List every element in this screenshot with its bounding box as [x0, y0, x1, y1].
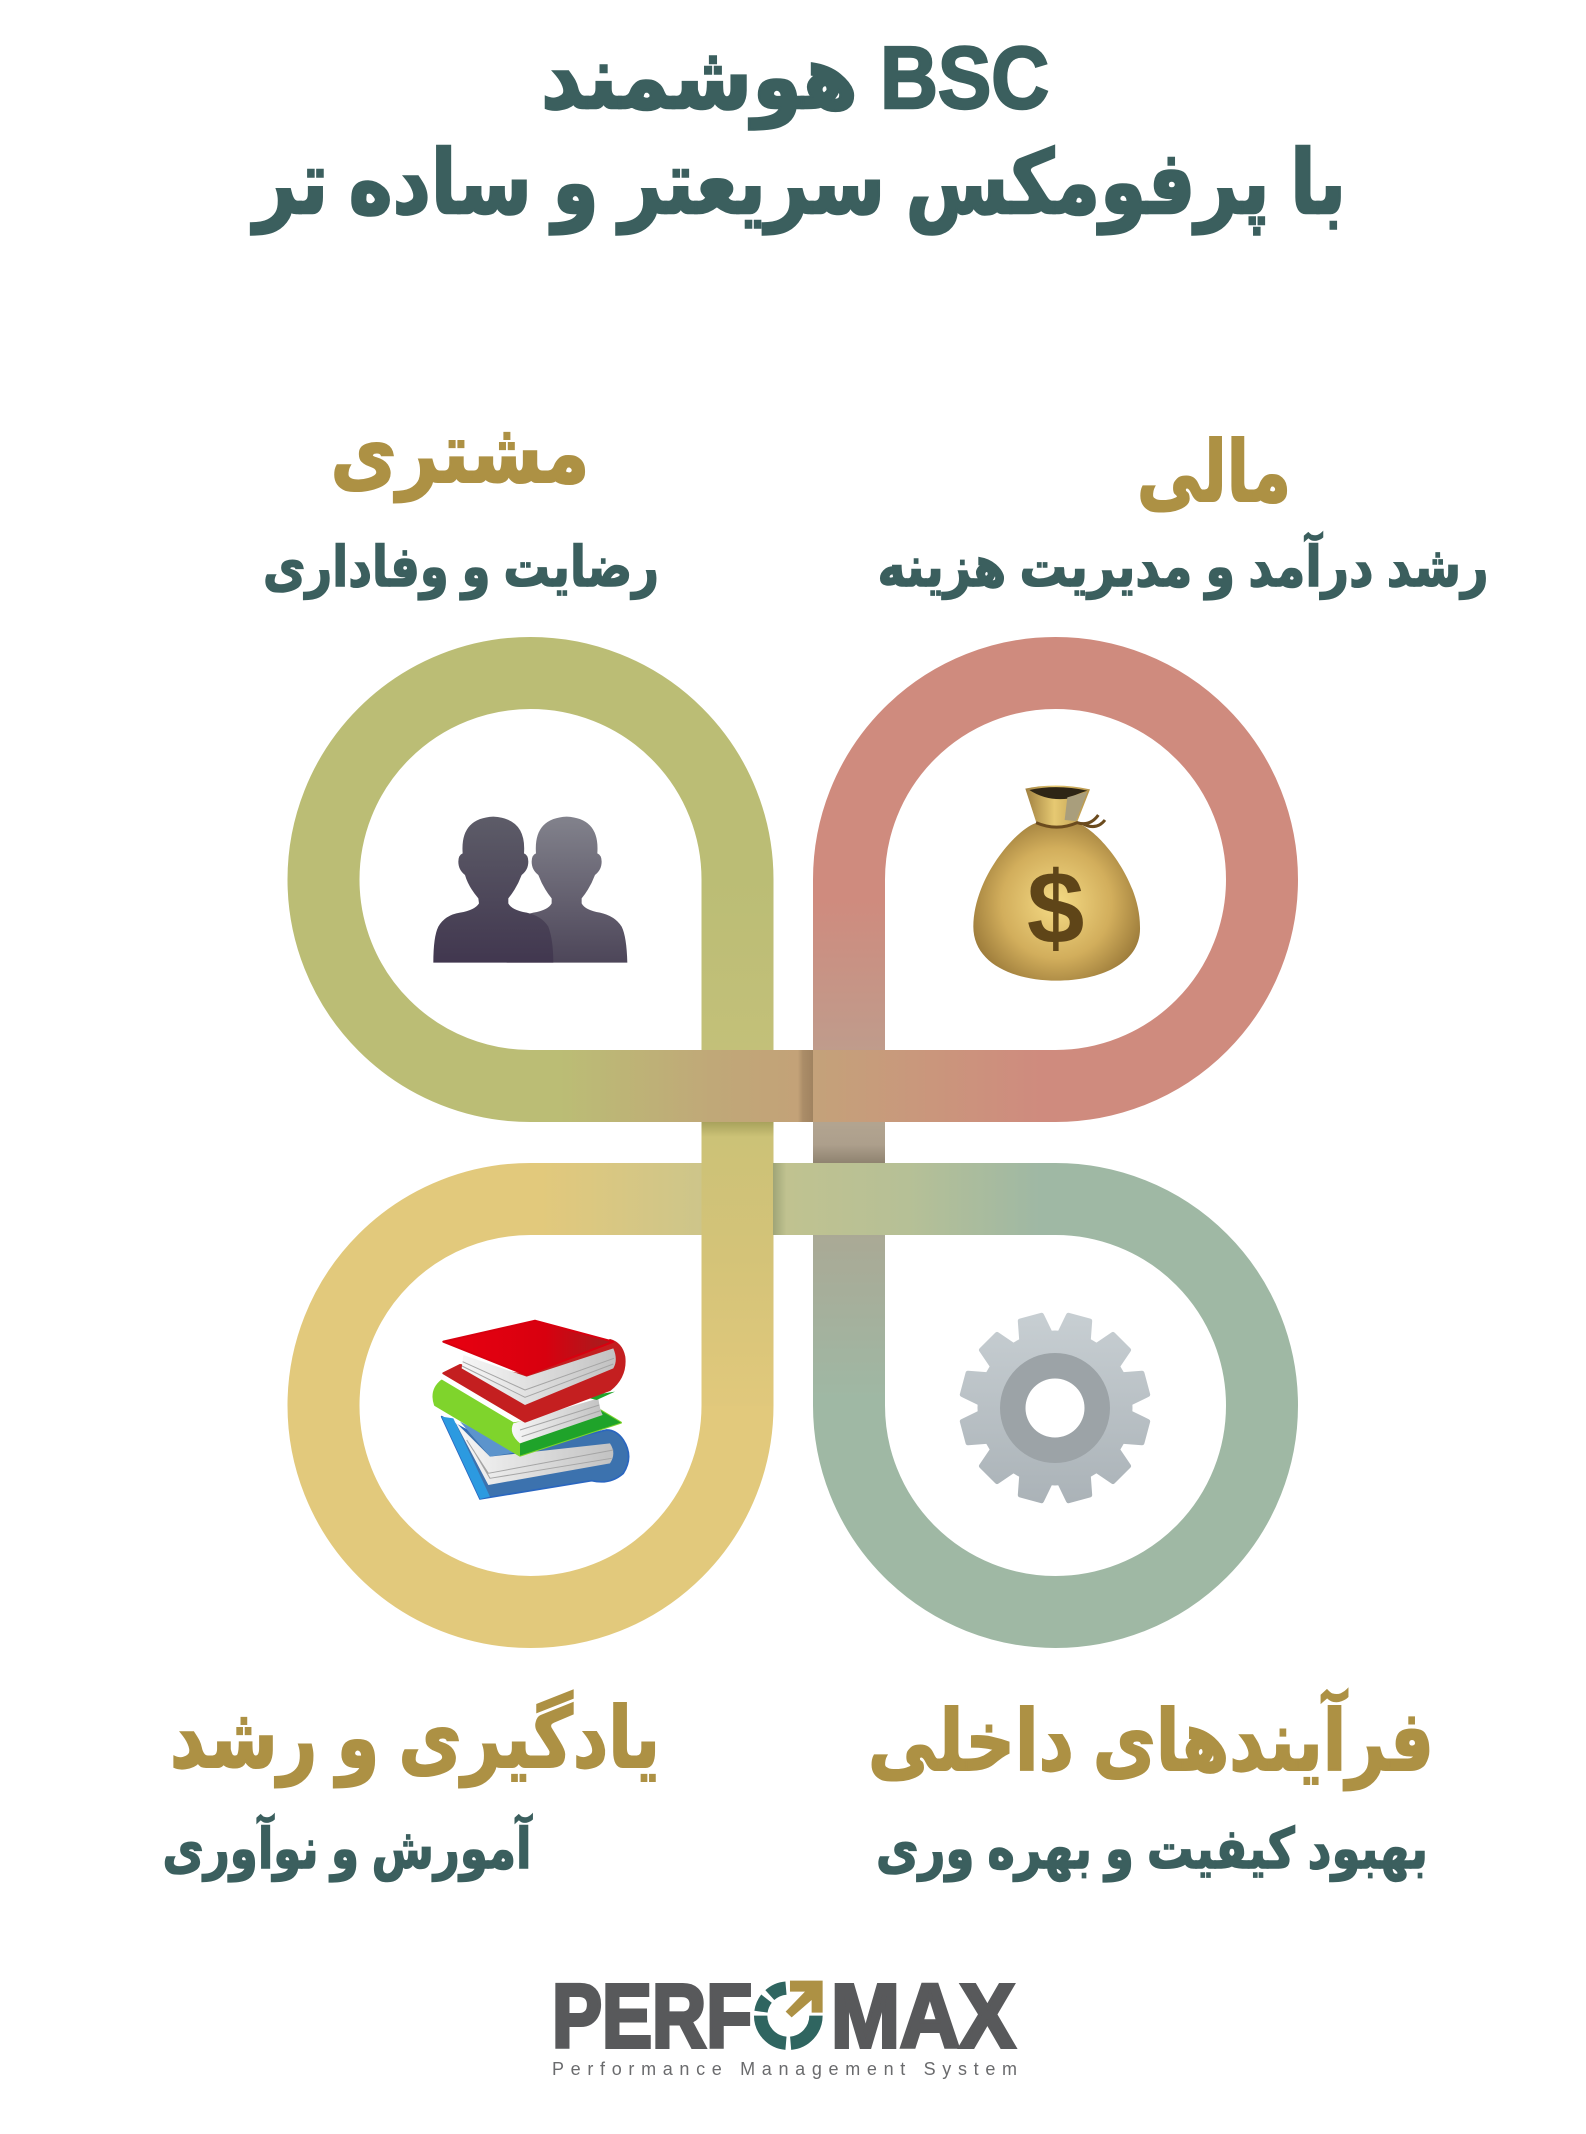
heading: learning and growth: یادگیری و رشد [170, 1690, 660, 1788]
loop: processes (sage) [773, 1163, 1262, 1612]
loop: customer (green) [323, 673, 813, 1122]
logo mark: ring and arrow [761, 1981, 823, 2043]
text: finance description: رشد درآمد و مدیریت هزینه [878, 532, 1488, 600]
heading: customer: مشتری [330, 406, 590, 503]
logo wordmark: MAX: MAX [831, 1967, 1015, 2067]
heading: internal processes: فرآیندهای داخلی [868, 1689, 1434, 1791]
text: processes description: بهبود کیفیت و بهره وری [876, 1817, 1428, 1882]
icon: money bag [973, 785, 1140, 981]
diagram: four-leaf loops [323, 673, 1262, 1612]
logo tagline: Performance Management System [552, 2059, 1017, 2079]
heading: finance: مالی [1137, 425, 1291, 519]
icon: gear [960, 1312, 1150, 1504]
title: BSC هوشمند [541, 28, 1049, 130]
text: customer description: رضایت و وفاداری [263, 535, 659, 600]
loop: finance (red) [813, 673, 1262, 1163]
title: با پرفومکس سریعتر و ساده تر [251, 133, 1346, 235]
icon: money bag: $ [1027, 849, 1084, 965]
logo wordmark: PERF: PERF [552, 1967, 752, 2067]
text: learning description: آمورش و نوآوری [162, 1814, 533, 1882]
icon: two people [433, 817, 627, 963]
title [251, 28, 1346, 235]
logo [552, 1967, 1017, 2079]
loop: learning (yellow) [323, 1122, 774, 1612]
icon: stack of books [433, 1321, 629, 1499]
